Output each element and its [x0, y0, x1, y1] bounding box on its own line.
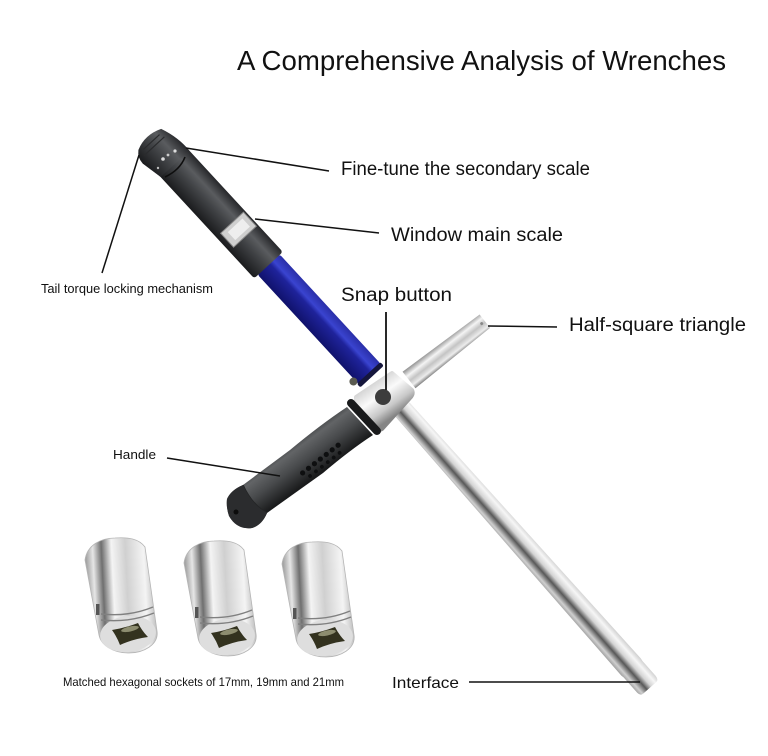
leader line: half-square triangle — [488, 326, 557, 327]
label: tail lock: Tail torque locking mechanism — [41, 282, 213, 296]
label: window scale: Window main scale — [391, 225, 563, 246]
socket 1 — [85, 538, 158, 655]
leader line: fine-tune scale — [186, 148, 329, 171]
wrench: lower steel shaft — [392, 400, 659, 697]
socket 2 — [184, 541, 257, 658]
leader line: window scale — [255, 219, 379, 233]
leader line: snap button — [385, 312, 387, 390]
leader line: interface — [469, 681, 640, 683]
leader line: handle — [167, 458, 280, 476]
wrench: central collar — [356, 373, 413, 430]
wrench: black rubber handle — [227, 403, 377, 528]
wrench: torque arm with black sleeve and blue shaft — [132, 122, 386, 393]
label: fine-tune scale: Fine-tune the secondary scale — [341, 159, 590, 180]
label: interface: Interface — [392, 675, 459, 692]
label: half-square triangle: Half-square triangle — [569, 315, 746, 336]
grip dots — [299, 442, 346, 482]
socket 3 — [282, 542, 355, 659]
leader line: tail lock — [102, 155, 139, 273]
label: snap button: Snap button — [341, 285, 452, 306]
label: handle: Handle — [113, 447, 156, 462]
wrench: upper steel shaft — [403, 313, 491, 388]
label: sockets: Matched hexagonal sockets of 17mm, 19mm and 21mm — [63, 675, 344, 689]
title: A Comprehensive Analysis of Wrenches — [237, 45, 726, 76]
